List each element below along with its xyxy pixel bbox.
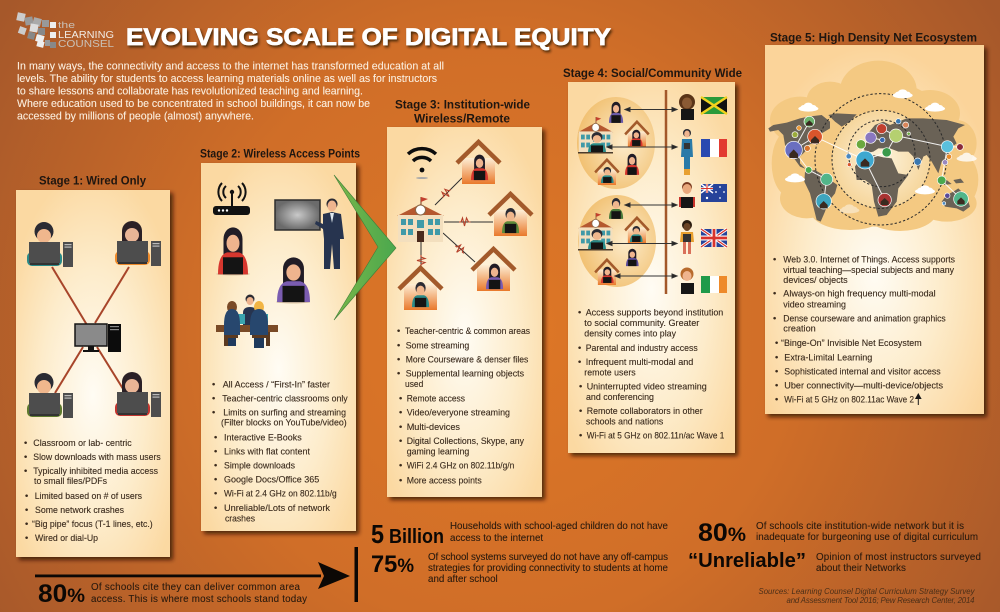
text: stage 4 bullets: • <box>579 382 582 392</box>
text: stage 5 bullets: • <box>773 254 776 264</box>
text: stage 5 bullets: creation <box>783 324 816 334</box>
sources: and Assessment Tool 2016; Pew Research Center, 2014 <box>786 596 975 605</box>
world map with network nodes <box>768 61 978 231</box>
flag: Australia <box>701 184 727 202</box>
text: stage 4 bullets: Access supports beyond institution <box>586 308 723 318</box>
text: stage 1 bullets: Limited based on # of users <box>35 491 142 501</box>
text: stage 5 bullets: • <box>773 289 776 299</box>
divider line <box>665 90 667 294</box>
arrows: school to world links <box>607 108 677 278</box>
flag: Ireland <box>701 276 727 293</box>
text: stage 1 bullets: • <box>25 533 28 543</box>
text: stage 1 bullets: • <box>25 491 28 501</box>
logo: the Learning Counsel <box>16 12 114 50</box>
stat: 75% of school systems: Of school systems surveyed do not have any off-campus <box>428 552 668 563</box>
international people <box>679 94 695 294</box>
icon: up arrow <box>916 394 921 405</box>
stat: Unreliable: about their Networks <box>816 563 906 574</box>
icon: school building <box>397 197 444 242</box>
stat: Unreliable <box>688 550 981 574</box>
timeline arrow <box>35 562 350 589</box>
text: stage 2 bullets: • <box>214 503 217 513</box>
text: stage 5 bullets: • <box>775 394 778 404</box>
text: stage 3 bullets: Video/everyone streaming <box>407 408 510 418</box>
stat: 80% common area access <box>38 580 307 608</box>
text: stage 1 bullets: “Big pipe” focus (T-1 lines, etc.) <box>32 519 153 529</box>
text: stage 5 bullets: Extra-Limital Learning <box>784 352 872 362</box>
text: stage 3 bullets: More Courseware & denser files <box>406 354 529 364</box>
icon: home with student 3 <box>472 249 515 291</box>
text: stage 4 bullets: and conferencing <box>586 392 654 402</box>
text: stage 3 bullets: • <box>399 422 402 432</box>
text: stage 2 bullets: • <box>214 475 217 485</box>
title: EVOLVING SCALE OF DIGITAL EQUITY <box>126 24 611 51</box>
text: stage 3 bullets: • <box>399 393 402 403</box>
text: stage 1 bullets: • <box>24 438 27 448</box>
stat: 5 Billion households: access to the internet <box>450 533 543 544</box>
icon: people meeting at table <box>216 294 278 348</box>
text: stage 3 bullets: Teacher-centric & common areas <box>405 326 530 336</box>
text: stage 5 bullets: Wi-Fi at 5 GHz on 802.11ac Wave 2 <box>784 394 914 404</box>
icon: central computer <box>75 324 121 352</box>
text: stage 4 bullets: Parental and industry access <box>586 343 698 353</box>
icon: teacher <box>315 198 344 269</box>
text: stage 5 bullets: Web 3.0. Internet of Things. Access supports <box>783 254 955 264</box>
text: stage 3 bullets: gaming learning <box>407 446 469 456</box>
stat: Unreliable: Opinion of most instructors surveyed <box>816 552 981 563</box>
icon: home with student 1 <box>457 142 500 184</box>
text: stage 5 bullets: • <box>773 313 776 323</box>
text: stage 3 bullets: WiFi 2.4 GHz on 802.11b/g/n <box>407 460 514 470</box>
stat: 75% of school systems: 75% <box>371 551 414 578</box>
text: stage 2 bullets: Wi-Fi at 2.4 GHz on 802.11b/g <box>224 489 337 499</box>
icon: wifi symbol <box>408 149 436 179</box>
stat: 80% institution-wide: 80% <box>698 519 746 547</box>
icon: smart board <box>275 200 320 230</box>
heading: stage 3: Stage 3: Institution-wide <box>395 97 530 111</box>
icon: student workstation top right <box>115 221 161 266</box>
text: stage 4 bullets: Uninterrupted video streaming <box>587 382 707 392</box>
panel: stage 3 <box>387 127 542 497</box>
text: stage 4 bullets: Wi-Fi at 5 GHz on 802.11n/ac Wave 1 <box>587 430 724 440</box>
intro text block: Where education used to be concentrated in school buildings, it can now be <box>17 98 370 110</box>
flag: Jamaica <box>701 97 727 114</box>
text: stage 2 bullets: (Filter blocks on YouTube/video) <box>221 418 347 428</box>
stat: 75% of school systems <box>371 551 669 585</box>
text: stage 5 bullets: “Binge-On” Invisible Net Ecosystem <box>781 338 922 348</box>
text: stage 5 bullets: virtual teaching—special subjects and many <box>783 265 954 275</box>
text: stage 2 bullets: • <box>212 393 215 403</box>
stat: 5 Billion households: 5 Billion <box>371 519 444 549</box>
text: stage 3 bullets: More access points <box>407 476 482 486</box>
text: stage 1 bullets: Some network crashes <box>35 505 124 515</box>
intro text block: levels. The ability for students to access learning materials online as well as for instructors <box>17 73 437 85</box>
text: stage 4 bullets: • <box>578 308 581 318</box>
stat: 80% institution-wide: inadequate for burgeoning use of digital curriculum <box>756 532 978 543</box>
text: stage 5 bullets: • <box>775 338 778 348</box>
sources: Sources: Learning Counsel Digital Curriculum Strategy Survey <box>758 587 976 596</box>
text: stage 2 bullets: • <box>212 379 215 389</box>
stat: 80% common area access: Of schools cite they can deliver common area <box>91 582 301 593</box>
wired network lines <box>52 267 129 393</box>
stat: 75% of school systems: and after school <box>428 574 498 585</box>
text: stage 1 bullets: Slow downloads with mass users <box>33 452 161 462</box>
stat: 80% institution-wide <box>698 519 978 547</box>
stat: 5 Billion households <box>371 519 669 549</box>
text: stage 3 bullets: • <box>399 476 402 486</box>
icon: student workstation bottom right <box>115 372 161 417</box>
text: stage 4 bullets: • <box>578 357 581 367</box>
text: stage 1 bullets: to small files/PDFs <box>34 476 107 486</box>
stat: 5 Billion households: Households with school-aged children do not have <box>450 521 669 532</box>
stat: 75% of school systems: strategies for providing connectivity to students at home <box>428 563 669 574</box>
stat: Unreliable: “Unreliable” <box>688 550 806 572</box>
icon: home with student 2 <box>489 194 532 236</box>
text: stage 1 bullets: Typically inhibited media access <box>33 466 158 476</box>
icon: home with student 4 <box>399 268 442 310</box>
text: stage 1 bullets: • <box>24 452 27 462</box>
text: stage 4 bullets: Remote collaborators in other <box>587 406 703 416</box>
logo: the Learning Counsel: the <box>58 20 75 31</box>
icon: student with laptop and glasses <box>276 257 310 304</box>
text: stage 2 bullets: Teacher-centric classrooms only <box>222 393 348 403</box>
text: stage 3 bullets: Supplemental learning objects <box>406 369 524 379</box>
text: stage 4 bullets: density comes into play <box>584 329 676 339</box>
text: stage 3 bullets: Multi-devices <box>407 422 460 432</box>
text: stage 4 bullets: remote users <box>584 367 636 377</box>
text: stage 2 bullets: Google Docs/Office 365 <box>224 475 319 485</box>
icon: student workstation top left <box>27 222 73 267</box>
intro text block: accessed by millions of people (almost) anywhere. <box>17 110 254 122</box>
heading: stage 1: Stage 1: Wired Only <box>39 174 146 188</box>
text: stage 3 bullets: • <box>397 340 400 350</box>
text: stage 2 bullets: • <box>214 446 217 456</box>
text: stage 3 bullets: • <box>397 354 400 364</box>
heading: stage 5: Stage 5: High Density Net Ecosystem <box>770 31 977 45</box>
text: stage 5 bullets: devices/ objects <box>783 275 848 285</box>
text: stage 5 bullets: • <box>775 352 778 362</box>
text: stage 1 bullets: • <box>25 505 28 515</box>
text: stage 2 bullets: Unreliable/Lots of network <box>224 503 330 513</box>
text: stage 3 bullets: Remote access <box>407 393 465 403</box>
arrow: green chevron <box>334 175 396 320</box>
text: stage 5 bullets: • <box>775 380 778 390</box>
text: stage 2 bullets: crashes <box>225 513 255 523</box>
community bubble: top <box>577 97 655 189</box>
text: stage 4 bullets: Infrequent multi-modal and <box>586 357 693 367</box>
text: stage 3 bullets: • <box>397 369 400 379</box>
text: stage 4 bullets: schools and nations <box>586 416 664 426</box>
logo: the Learning Counsel: LEARNING <box>58 29 114 41</box>
panel: stage 2 <box>201 163 356 531</box>
heading: stage 2: Stage 2: Wireless Access Points <box>200 146 360 160</box>
panel: stage 5 <box>765 45 984 414</box>
intro text block: In many ways, the connectivity and access to the internet has transformed education at all <box>17 60 444 72</box>
text: stage 2 bullets: • <box>214 460 217 470</box>
stat: 80% common area access: access. This is where most schools stand today <box>91 594 307 605</box>
text: stage 4 bullets: • <box>579 406 582 416</box>
text: stage 2 bullets: Limits on surfing and streaming <box>223 407 346 417</box>
text: stage 3 bullets: used <box>405 379 423 389</box>
logo: the Learning Counsel: COUNSEL <box>58 38 114 50</box>
text: stage 1 bullets: • <box>24 466 27 476</box>
text: stage 2 bullets: Interactive E-Books <box>224 432 302 442</box>
text: stage 5 bullets: Dense courseware and animation graphics <box>783 313 946 323</box>
flag: France <box>701 139 727 157</box>
text: stage 2 bullets: • <box>214 432 217 442</box>
text: stage 2 bullets: Simple downloads <box>224 460 295 470</box>
text: stage 5 bullets: video streaming <box>783 299 846 309</box>
text: stage 4 bullets: • <box>578 343 581 353</box>
community bubble: bottom <box>578 195 656 287</box>
text: stage 4 bullets: to social community. Greater <box>584 318 699 328</box>
text: stage 1 bullets: Classroom or lab- centric <box>33 438 132 448</box>
divider bar <box>354 547 358 602</box>
connectors: school to homes <box>417 178 493 266</box>
text: stage 1 bullets: Wired or dial-Up <box>35 533 98 543</box>
text: stage 3 bullets: Digital Collections, Skype, any <box>407 436 524 446</box>
panel: stage 1 <box>16 190 170 557</box>
map backdrop cloud <box>770 61 978 231</box>
text: stage 5 bullets: Sophisticated internal and visitor access <box>784 366 941 376</box>
icon: wifi router <box>213 183 250 215</box>
text: stage 2 bullets: Links with flat content <box>224 446 310 456</box>
text: stage 3 bullets: Some streaming <box>406 340 469 350</box>
text: stage 2 bullets: All Access / “First-In” faster <box>223 379 330 389</box>
text: stage 3 bullets: • <box>397 326 400 336</box>
text: stage 5 bullets: • <box>775 366 778 376</box>
stat: 80% common area access: 80% <box>38 580 85 608</box>
panel: stage 4 <box>568 82 735 453</box>
text: stage 1 bullets: • <box>25 519 28 529</box>
text: stage 2 bullets: • <box>212 407 215 417</box>
heading: stage 4: Stage 4: Social/Community Wide <box>563 66 742 80</box>
text: stage 3 bullets: • <box>399 436 402 446</box>
text: stage 3 bullets: • <box>399 460 402 470</box>
icon: student workstation bottom left <box>27 373 73 418</box>
intro text block: to share lessons and collaborate has revolutionized teaching and learning. <box>17 86 363 98</box>
icon: student with laptop <box>216 227 250 276</box>
text: stage 5 bullets: Uber connectivity—multi-device/objects <box>784 380 943 390</box>
text: stage 3 bullets: • <box>399 408 402 418</box>
text: stage 2 bullets: • <box>214 489 217 499</box>
heading: stage 3: Wireless/Remote <box>414 111 510 125</box>
flag: United Kingdom <box>701 229 727 247</box>
text: stage 5 bullets: Always-on high frequency multi-modal <box>783 289 936 299</box>
text: stage 4 bullets: • <box>579 430 582 440</box>
stat: 80% institution-wide: Of schools cite institution-wide network but it is <box>756 521 964 532</box>
